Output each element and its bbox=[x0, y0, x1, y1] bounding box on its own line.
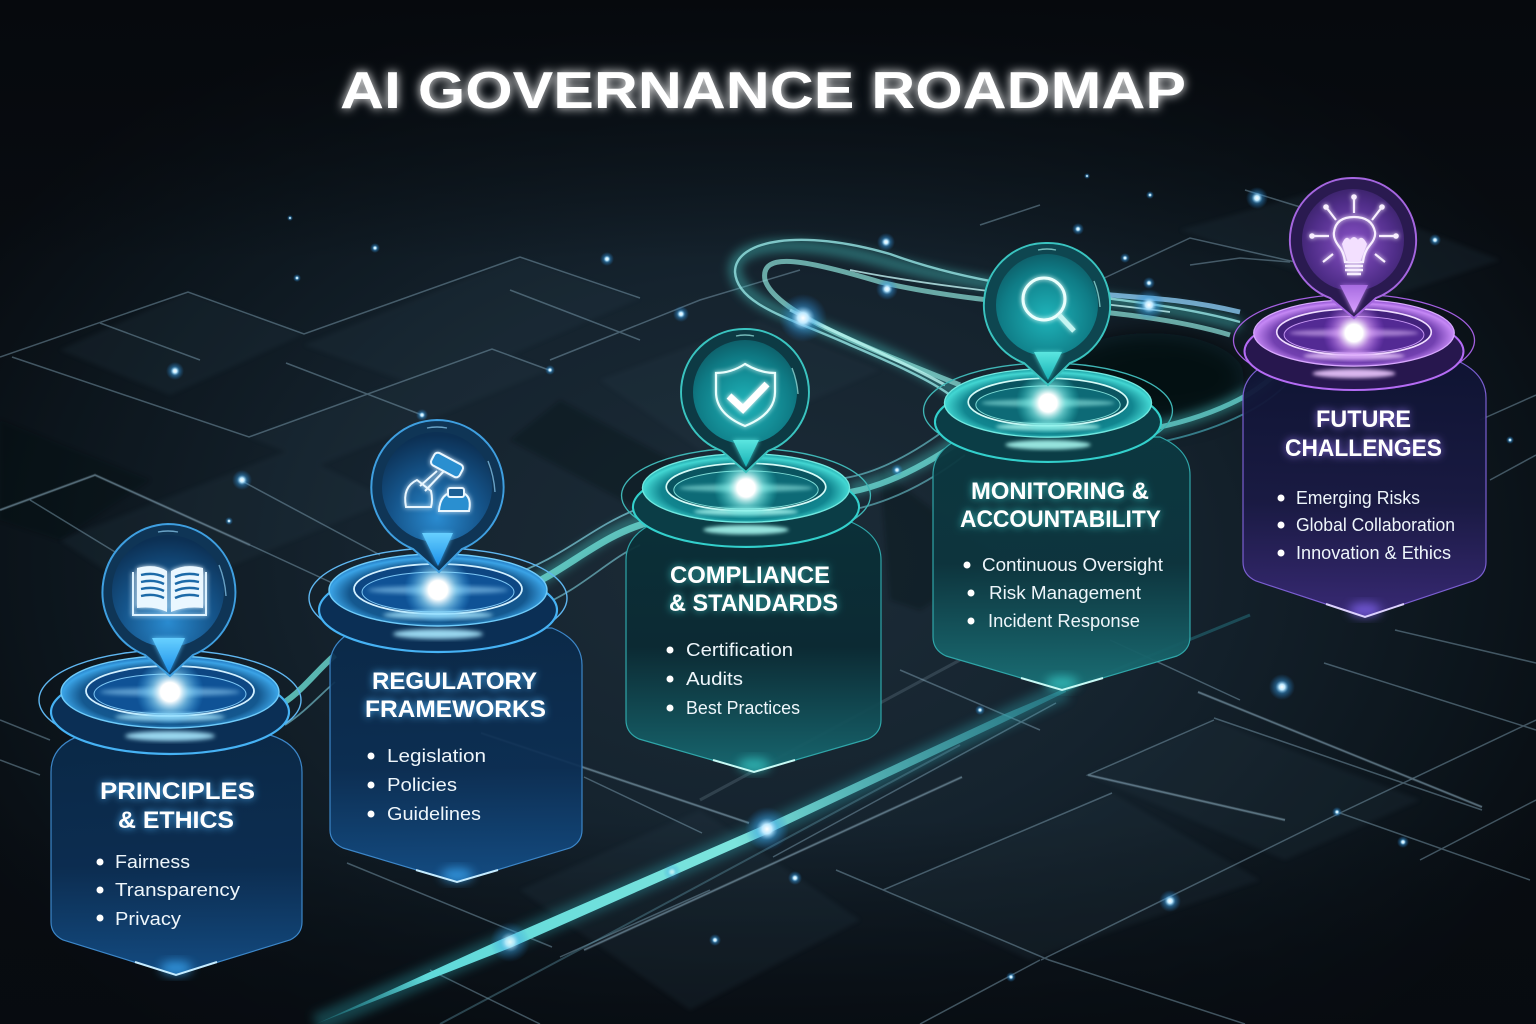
icon: magnifying glass bbox=[1023, 278, 1074, 331]
panel tip glow bbox=[135, 961, 217, 975]
bullet list bbox=[964, 555, 1163, 631]
stage 5: future challenges bbox=[1233, 178, 1486, 617]
stage 4 to 5 arcs bbox=[1145, 355, 1288, 430]
heading: FRAMEWORKS bbox=[365, 696, 546, 723]
platform bbox=[924, 363, 1172, 462]
bullet list: Fairness bbox=[115, 852, 190, 872]
pin with light bulb icon bbox=[1290, 178, 1416, 318]
bullet list: Guidelines bbox=[387, 804, 481, 824]
light beam road bbox=[316, 615, 1250, 1024]
icon: open book bbox=[133, 566, 206, 615]
pin with book icon bbox=[102, 524, 235, 676]
heading: FUTURE bbox=[1316, 406, 1411, 433]
bullet list bbox=[666, 640, 800, 718]
panel tip glow bbox=[416, 868, 498, 882]
heading bbox=[365, 668, 546, 723]
stage 1: principles and ethics bbox=[39, 524, 302, 975]
panel tip glow bbox=[1326, 603, 1404, 617]
icon: gavel bbox=[405, 451, 470, 511]
bullet list: Legislation bbox=[387, 746, 486, 766]
panel tip glow bbox=[713, 758, 795, 772]
dark shadow behind ribbons bbox=[1055, 333, 1245, 423]
heading: MONITORING & bbox=[971, 478, 1149, 505]
bullet list bbox=[1278, 488, 1455, 563]
panel: compliance and standards bbox=[626, 522, 881, 772]
bullet list: Risk Management bbox=[989, 583, 1141, 603]
stage 3 to 4 ribbon bbox=[850, 440, 962, 492]
platform bbox=[39, 650, 301, 754]
bullet list: Emerging Risks bbox=[1296, 488, 1420, 508]
glowing dots bbox=[166, 173, 1514, 982]
circuit tiles bbox=[60, 190, 1500, 1010]
bullet list: Audits bbox=[686, 669, 743, 689]
heading: & STANDARDS bbox=[669, 590, 838, 617]
pin with magnifier icon bbox=[984, 243, 1110, 385]
heading: & ETHICS bbox=[118, 807, 234, 834]
pin with gavel icon bbox=[371, 420, 504, 572]
bullet list: Innovation & Ethics bbox=[1296, 543, 1451, 563]
bullet list: Continuous Oversight bbox=[982, 555, 1163, 575]
bullet list: Best Practices bbox=[686, 698, 800, 718]
icon: light bulb bbox=[1309, 194, 1399, 274]
bullet list: Policies bbox=[387, 775, 457, 795]
heading: REGULATORY bbox=[372, 668, 537, 695]
platform bbox=[309, 548, 567, 652]
panel: monitoring and accountability bbox=[933, 437, 1190, 690]
bullet list: Transparency bbox=[115, 880, 240, 900]
stage 3: compliance and standards bbox=[622, 329, 881, 772]
flowing path ribbons bbox=[275, 233, 1290, 725]
panel tip glow bbox=[1021, 676, 1103, 690]
bullet list: Privacy bbox=[115, 909, 181, 929]
heading: COMPLIANCE bbox=[670, 562, 830, 589]
heading: ACCOUNTABILITY bbox=[960, 506, 1161, 533]
heading bbox=[669, 562, 838, 617]
pin with shield icon bbox=[681, 329, 809, 472]
heading bbox=[960, 478, 1161, 533]
panel: future challenges bbox=[1243, 362, 1486, 617]
heading: PRINCIPLES bbox=[100, 778, 255, 805]
bullet list: Incident Response bbox=[988, 611, 1140, 631]
platform bbox=[622, 448, 870, 547]
panel: principles and ethics bbox=[51, 735, 302, 975]
bullet list: Certification bbox=[686, 640, 793, 660]
heading bbox=[1285, 406, 1442, 462]
stage 1 to 2 ribbon bbox=[275, 655, 335, 708]
icon: shield check bbox=[716, 364, 775, 426]
title: AI GOVERNANCE ROADMAP bbox=[340, 62, 1186, 120]
stage 2: regulatory frameworks bbox=[309, 420, 582, 882]
bullet list: Global Collaboration bbox=[1296, 515, 1455, 535]
bullet list bbox=[96, 852, 240, 929]
heading: CHALLENGES bbox=[1285, 435, 1442, 462]
bullet list bbox=[368, 746, 486, 824]
outer loop bbox=[735, 240, 1240, 395]
title: AI GOVERNANCE ROADMAP bbox=[340, 62, 1186, 120]
heading bbox=[100, 778, 255, 834]
stage 2 to 3 ribbon bbox=[520, 522, 650, 590]
platform bbox=[1233, 294, 1475, 390]
panel: regulatory frameworks bbox=[330, 628, 582, 882]
stage 4: monitoring and accountability bbox=[924, 243, 1190, 690]
